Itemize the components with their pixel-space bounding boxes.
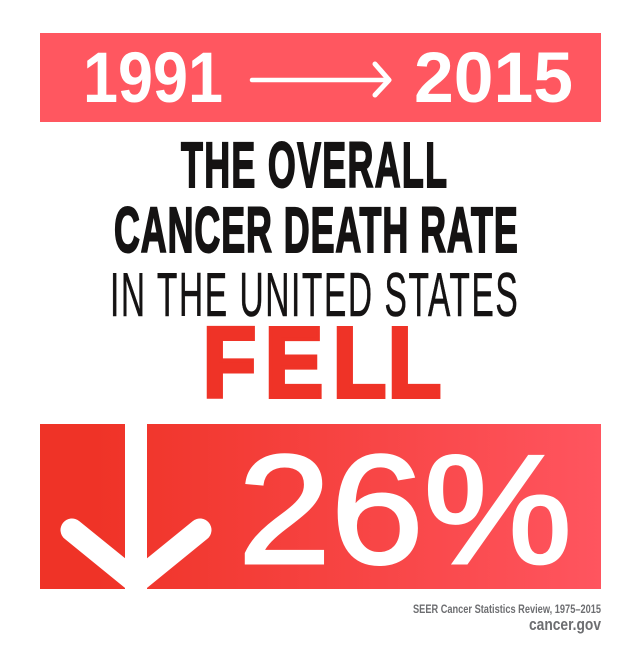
website: cancer.gov: cancer.gov <box>529 615 601 634</box>
arrow: 1991 to 2015 <box>252 64 389 95</box>
statistic: 26%: 26% <box>238 423 572 596</box>
heading: the overall: THE OVERALL <box>181 129 447 201</box>
heading: cancer death rate: CANCER DEATH RATE <box>114 194 518 266</box>
panel: year range banner <box>40 33 601 122</box>
start year 1991: 1991 <box>83 39 223 118</box>
icon: down arrow <box>72 424 200 589</box>
heading: in the united states: IN THE UNITED STATES <box>110 260 518 330</box>
heading: fell: FELL <box>203 307 441 418</box>
panel: 26 percent banner <box>40 423 601 596</box>
end year 2015: 2015 <box>414 39 573 118</box>
